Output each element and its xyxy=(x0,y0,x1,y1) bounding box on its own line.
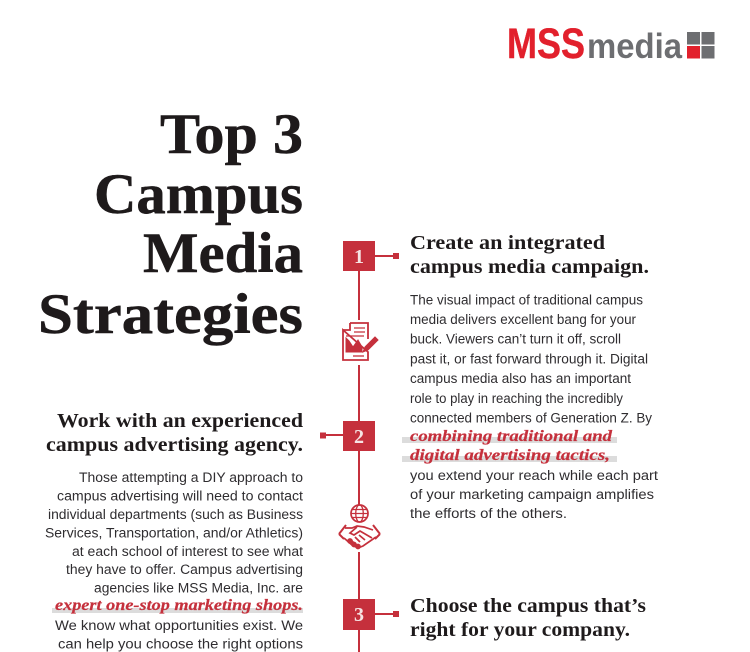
step 3 badge: 3 xyxy=(354,604,364,626)
title: Media xyxy=(143,222,303,285)
step 1 badge: 1 xyxy=(354,246,364,268)
heading: step 3: right for your company. xyxy=(410,619,630,641)
text block: step 1 body xyxy=(402,292,658,522)
text block: step 1 body: role to play in reaching the incredibly xyxy=(410,391,624,407)
heading: step 3: Choose the campus that’s xyxy=(410,595,646,617)
heading: step 1 xyxy=(410,232,649,278)
step 3 badge xyxy=(343,599,375,630)
title: Strategies xyxy=(38,283,303,346)
step 2 badge xyxy=(343,421,375,451)
icon: globe and handshake xyxy=(339,505,380,548)
logo: MSS media: media xyxy=(587,27,683,66)
title: Top 3 xyxy=(160,103,303,166)
highlight: combining traditional and digital advertising tactics: combining traditional and xyxy=(410,428,613,445)
text block: step 2 body: We know what opportunities exist. We xyxy=(55,618,303,634)
step 1 badge xyxy=(343,241,375,271)
title xyxy=(38,103,303,346)
text block: step 2 body: campus advertising will need to contact xyxy=(57,488,303,504)
step 2 badge: 2 xyxy=(354,426,364,448)
text block: step 2 body: Those attempting a DIY approach to xyxy=(79,470,303,486)
text block: step 1 body: the efforts of the others. xyxy=(410,506,567,522)
heading: step 2: Work with an experienced xyxy=(57,410,304,432)
text block: step 1 body: of your marketing campaign amplifies xyxy=(410,487,654,503)
logo: MSS media xyxy=(507,20,714,68)
text block: step 1 body: media delivers excellent bang for your xyxy=(410,312,636,328)
text block: step 2 body: individual departments (such as Business xyxy=(48,507,303,523)
text block: step 1 body: campus media also has an important xyxy=(410,371,631,387)
text block: step 2 body: they have to offer. Campus advertising xyxy=(66,562,303,578)
heading: step 2: campus advertising agency. xyxy=(46,434,303,456)
heading: step 3 xyxy=(410,595,646,641)
icon: document with pen and chart xyxy=(343,323,378,360)
text block: step 2 body: agencies like MSS Media, Inc. are xyxy=(94,580,303,596)
title: Campus xyxy=(94,163,303,226)
highlight: combining traditional and digital advertising tactics xyxy=(402,428,617,464)
text block: step 1 body: buck. Viewers can’t turn it off, scroll xyxy=(410,332,621,348)
highlight: expert one-stop marketing shops: expert one-stop marketing shops. xyxy=(55,597,303,614)
text block: step 1 body: The visual impact of traditional campus xyxy=(410,292,643,308)
heading: step 1: campus media campaign. xyxy=(410,256,649,278)
text block: step 1 body: you extend your reach while each part xyxy=(410,468,658,484)
text block: step 2 body: at each school of interest to see what xyxy=(72,544,303,560)
text block: step 2 body xyxy=(45,470,303,652)
text block: step 2 body: Services, Transportation, and/or Athletics) xyxy=(45,526,303,542)
heading: step 1: Create an integrated xyxy=(410,232,606,254)
text block: step 1 body: connected members of Generation Z. By xyxy=(410,410,653,426)
heading: step 2 xyxy=(46,410,304,456)
timeline xyxy=(320,241,399,652)
text block: step 1 body: past it, or fast forward through it. Digital xyxy=(410,352,648,368)
highlight: combining traditional and digital advertising tactics: digital advertising tactics, xyxy=(410,447,610,464)
logo: MSS media: MSS xyxy=(507,20,585,68)
